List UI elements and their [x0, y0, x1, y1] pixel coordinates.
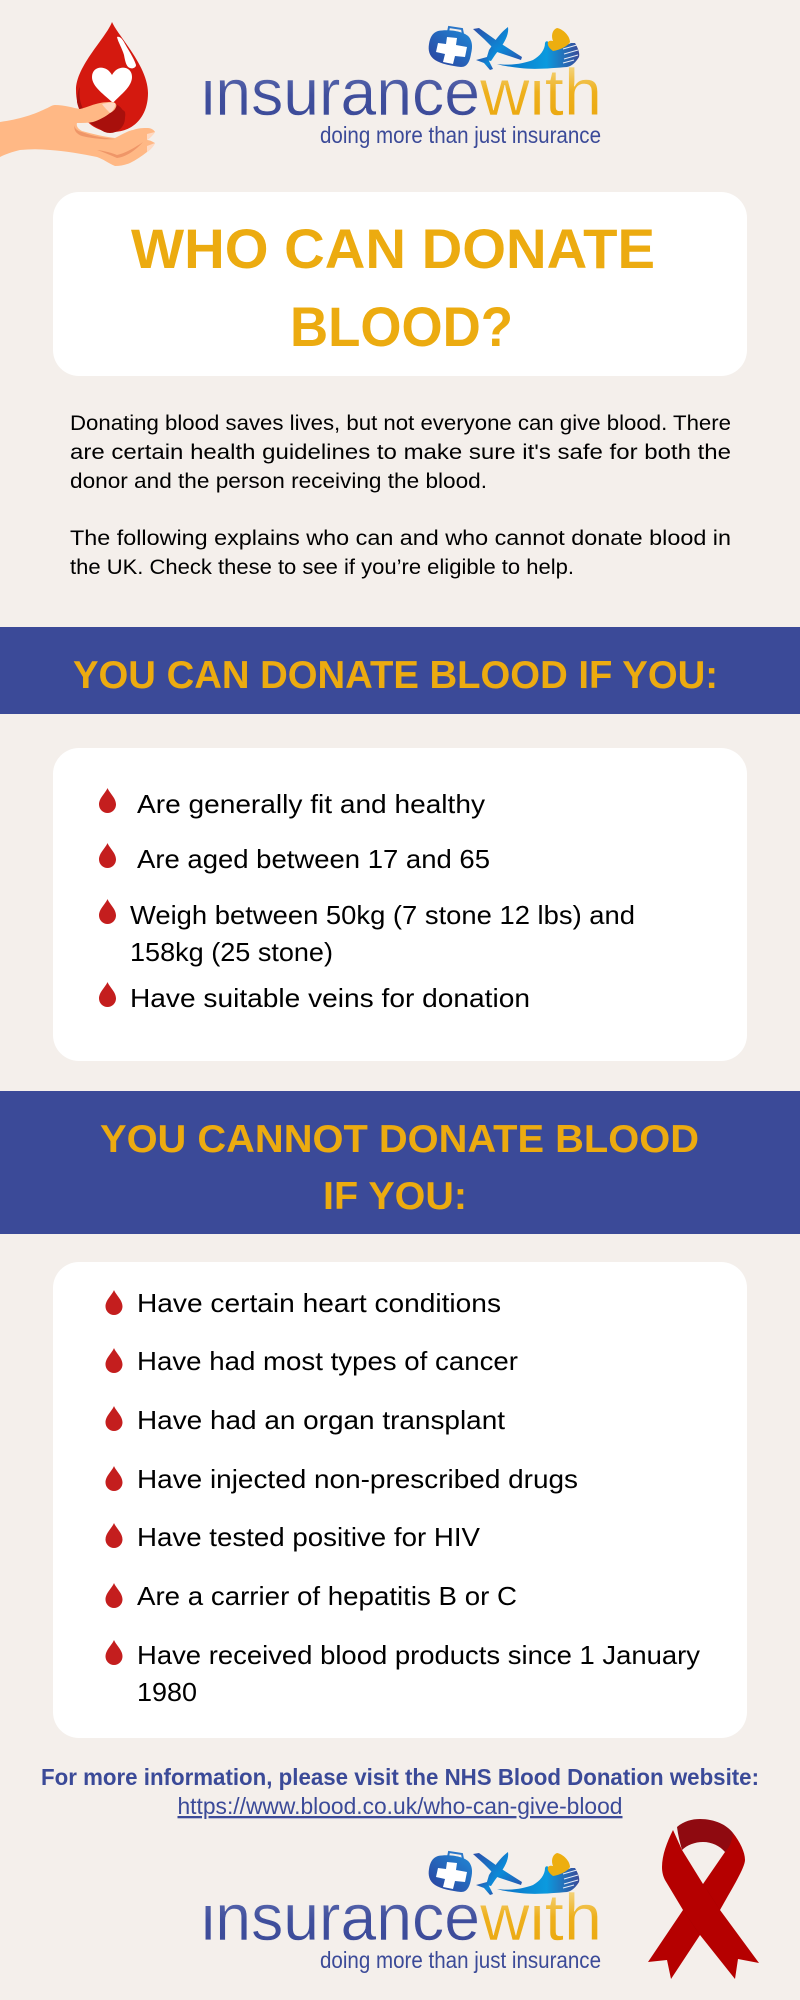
list item: Have certain heart conditions	[137, 1288, 501, 1318]
panel: title	[53, 192, 747, 376]
footer: more information	[41, 1764, 759, 1819]
logo wordmark: with: with	[479, 55, 602, 129]
list item: Are aged between 17 and 65	[137, 844, 490, 874]
text block: introduction: the UK. Check these to see if you’re eligible to help.	[70, 555, 574, 579]
list item: Weigh between 50kg (7 stone 12 lbs) and	[130, 900, 635, 930]
panel: can donate list	[53, 748, 747, 1061]
logo wordmark: insurance: insurance	[201, 55, 480, 129]
logo wordmark: insurance: insurance	[201, 1880, 480, 1954]
illustration: hand holding blood drop	[0, 22, 155, 166]
logo tagline: doing more than just insurance	[320, 122, 601, 148]
list item: Have had most types of cancer	[137, 1346, 518, 1376]
list item: 158kg (25 stone)	[130, 937, 333, 967]
heading: you cannot donate: YOU CANNOT DONATE BLOOD	[100, 1118, 699, 1161]
title: WHO CAN DONATE	[131, 217, 655, 280]
heading: you can donate: YOU CAN DONATE BLOOD IF YOU:	[73, 654, 718, 697]
list item: Have tested positive for HIV	[137, 1522, 481, 1552]
heading: you cannot donate: IF YOU:	[323, 1175, 467, 1218]
text block: introduction: The following explains who can and who cannot donate blood in	[70, 526, 731, 550]
icon: hand with heart	[497, 1853, 579, 1894]
text block: introduction	[70, 411, 731, 579]
icon: first aid kit	[429, 27, 472, 67]
text block: introduction: Donating blood saves lives, but not everyone can give blood. There	[70, 411, 731, 435]
logo tagline: doing more than just insurance	[320, 1947, 601, 1973]
banner: you cannot donate	[0, 1091, 800, 1234]
banner: you can donate	[0, 627, 800, 714]
icon: airplane	[473, 1852, 522, 1895]
icon: hand	[0, 102, 155, 166]
title: BLOOD?	[290, 295, 513, 358]
panel: cannot donate list	[53, 1262, 747, 1738]
list item: Have suitable veins for donation	[130, 983, 530, 1013]
text block: introduction: donor and the person receiving the blood.	[70, 469, 487, 493]
icon: hand with heart	[497, 28, 579, 69]
list item	[99, 899, 635, 967]
logo: insurancewith footer	[199, 1852, 602, 1973]
list item: Have had an organ transplant	[137, 1405, 506, 1435]
footer link: https://www.blood.co.uk/who-can-give-blood	[178, 1793, 622, 1819]
footer text: For more information, please visit the NHS Blood Donation website:	[41, 1764, 759, 1790]
list item	[106, 1640, 700, 1707]
icon: first aid kit	[429, 1852, 472, 1892]
list item: 1980	[137, 1677, 197, 1707]
list item: Have injected non-prescribed drugs	[137, 1464, 578, 1494]
icon: airplane	[473, 27, 522, 70]
text block: introduction: are certain health guidelines to make sure it's safe for both the	[70, 440, 731, 464]
list item: Are a carrier of hepatitis B or C	[137, 1581, 517, 1611]
icon: red ribbon	[648, 1819, 759, 1979]
logo wordmark: with: with	[479, 1880, 602, 1954]
logo: insurancewith header	[199, 27, 602, 148]
icon: blood drop	[76, 22, 148, 133]
list item: Have received blood products since 1 January	[137, 1640, 700, 1670]
list item: Are generally fit and healthy	[137, 789, 485, 819]
